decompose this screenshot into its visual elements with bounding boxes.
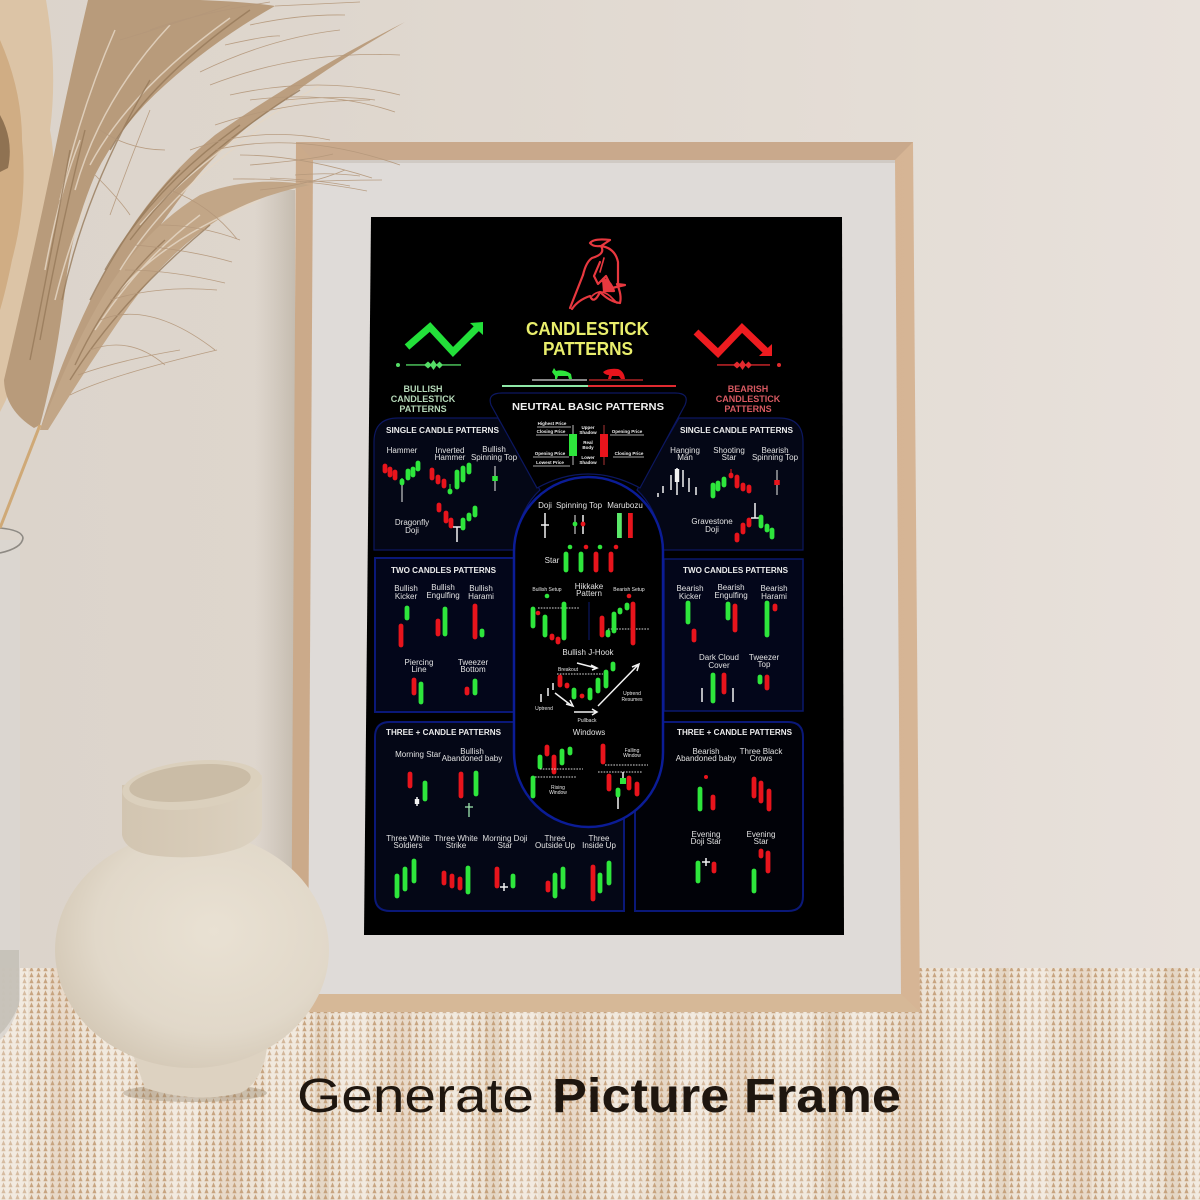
bullish engulfing	[426, 583, 460, 634]
label: bearish	[716, 384, 781, 414]
evening star: Star	[754, 837, 769, 846]
hanging man	[658, 446, 700, 497]
hikkake pattern: Bullish Setup	[532, 587, 562, 593]
gravestone doji: Doji	[705, 525, 719, 534]
label: bearish: BEARISH	[728, 384, 768, 394]
bearish spinning top	[752, 446, 799, 495]
piercing line	[405, 658, 433, 702]
marubozu	[607, 501, 643, 538]
bullish j-hook: Breakout	[558, 667, 579, 673]
bearish spinning top: Spinning Top	[752, 453, 799, 462]
evening star	[747, 830, 775, 891]
tweezer bottom: Tweezer	[458, 658, 488, 667]
label: bullish	[391, 384, 456, 414]
logo: bull and bear figure	[570, 239, 625, 309]
heading: SINGLE CANDLE PATTERNS	[386, 426, 500, 435]
dark cloud cover: Cover	[708, 661, 730, 670]
three black crows: Three Black	[740, 747, 783, 756]
basic candle anatomy diagram: Closing Price	[537, 429, 566, 434]
dragonfly doji: Doji	[405, 526, 419, 535]
morning star: Morning Star	[395, 750, 441, 759]
three black crows	[740, 747, 783, 809]
gravestone doji: Gravestone	[691, 517, 733, 526]
shooting star: Shooting	[713, 446, 745, 455]
windows: Windows	[573, 728, 605, 737]
evening doji star	[691, 830, 722, 881]
bullish j-hook: Pullback	[578, 718, 597, 724]
basic candle anatomy diagram: Lowest Price	[536, 460, 564, 465]
bearish abandoned baby: Abandoned baby	[676, 754, 736, 763]
bullish spinning top: Spinning Top	[471, 453, 518, 462]
panel: neutral basic patterns	[490, 393, 686, 488]
windows: Window	[549, 790, 567, 796]
vase shadow	[123, 1084, 267, 1102]
plume: dark core	[0, 115, 10, 172]
doji: Doji	[538, 501, 552, 510]
ornament: red	[717, 360, 781, 370]
wispy fibres	[70, 2, 400, 395]
bullish engulfing: Engulfing	[426, 591, 460, 600]
basic candle anatomy diagram: Shadow	[579, 430, 597, 435]
bullish spinning top: Bullish	[482, 445, 506, 454]
icon: bear	[603, 369, 625, 379]
spinning top: Spinning Top	[556, 501, 603, 510]
heading: THREE + CANDLE PATTERNS	[386, 728, 502, 737]
panel: three plus candle bullish	[375, 722, 624, 911]
bearish engulfing	[714, 583, 748, 630]
caption	[297, 1070, 901, 1123]
bearish abandoned baby	[676, 747, 736, 809]
windows	[533, 728, 648, 809]
vase lip	[120, 754, 264, 816]
dark cloud cover: Dark Cloud	[699, 653, 739, 662]
title: PATTERNS	[543, 338, 633, 359]
poster	[364, 217, 844, 935]
tweezer top	[749, 653, 779, 688]
basic candle anatomy diagram: Shadow	[579, 460, 597, 465]
frame top rail	[296, 142, 913, 160]
basic candle anatomy diagram: Highest Price	[538, 421, 567, 426]
mat board	[308, 160, 901, 994]
label: bullish: PATTERNS	[399, 404, 447, 414]
plume: lower right sweep	[40, 182, 310, 430]
frame	[291, 142, 920, 1012]
bullish harami: Bullish	[469, 584, 493, 593]
bullish j-hook	[535, 648, 643, 724]
three white strike	[434, 834, 478, 892]
basic candle anatomy diagram: Real	[583, 440, 593, 445]
title	[526, 318, 650, 359]
hanging man: Hanging	[670, 446, 700, 455]
three white strike: Strike	[446, 841, 467, 850]
plume: warm centre	[0, 40, 24, 310]
hikkake pattern: Hikkake	[575, 582, 604, 591]
ornament: green	[396, 360, 461, 370]
fibres across frame	[233, 154, 367, 191]
hanging man: Man	[677, 453, 693, 462]
shooting star: Star	[722, 453, 737, 462]
morning doji star: Star	[498, 841, 513, 850]
panel: three plus candle bearish	[635, 722, 803, 911]
panel: two candles bearish	[664, 559, 803, 711]
three outside up	[535, 834, 576, 896]
dark cloud cover	[699, 653, 739, 702]
morning star	[395, 750, 441, 806]
icon: red down arrow	[696, 328, 772, 356]
bullish abandoned baby: Bullish	[460, 747, 484, 756]
plume: light left	[0, 0, 54, 412]
bullish harami	[468, 584, 494, 637]
divider with bull and bear	[502, 368, 676, 386]
gravestone doji	[691, 503, 772, 540]
caption: Generate	[297, 1070, 534, 1123]
evening doji star: Doji Star	[691, 837, 722, 846]
windows: Falling	[625, 748, 640, 754]
woven rug	[0, 968, 1200, 1200]
bullish j-hook: Resumes	[621, 697, 643, 703]
inverted hammer: Hammer	[435, 453, 466, 462]
mat inner shadow	[313, 160, 895, 163]
bearish kicker	[676, 584, 704, 640]
three inside up	[582, 834, 616, 899]
bullish j-hook: Uptrend	[535, 706, 553, 712]
bullish harami: Harami	[468, 592, 494, 601]
frame bottom rail	[291, 994, 920, 1012]
bearish kicker: Kicker	[679, 592, 701, 601]
dragonfly doji: Dragonfly	[395, 518, 429, 527]
basic candle anatomy diagram: Closing Price	[615, 451, 644, 456]
bullish abandoned baby: Abandoned baby	[442, 754, 502, 763]
hammer	[385, 446, 418, 502]
vase opening	[127, 759, 253, 807]
piercing line: Line	[411, 665, 427, 674]
heading: THREE + CANDLE PATTERNS	[677, 728, 793, 737]
shooting star	[713, 446, 749, 496]
tweezer top: Top	[758, 660, 771, 669]
glass vase	[0, 528, 23, 1040]
doji	[538, 501, 552, 538]
three black crows: Crows	[750, 754, 772, 763]
hikkake pattern	[532, 582, 650, 643]
tweezer bottom	[458, 658, 488, 693]
three white soldiers	[386, 834, 430, 896]
vase neck	[122, 775, 262, 857]
title: CANDLESTICK	[526, 318, 650, 339]
plume light streaks	[45, 18, 320, 330]
hikkake pattern: Pattern	[576, 589, 602, 598]
heading: TWO CANDLES PATTERNS	[683, 566, 789, 575]
bullish engulfing: Bullish	[431, 583, 455, 592]
bearish harami: Harami	[761, 592, 787, 601]
bullish j-hook: Bullish J-Hook	[562, 648, 615, 657]
tweezer top: Tweezer	[749, 653, 779, 662]
bullish spinning top	[471, 445, 518, 491]
three outside up: Outside Up	[535, 841, 576, 850]
windows: Window	[623, 753, 641, 759]
icon: green up arrow	[407, 322, 483, 352]
windows: Rising	[551, 785, 565, 791]
label: bullish: BULLISH	[404, 384, 442, 394]
vase body	[55, 832, 329, 1068]
bullish j-hook: Uptrend	[623, 691, 641, 697]
vase	[55, 754, 329, 1102]
bullish abandoned baby	[442, 747, 502, 817]
three inside up: Three	[589, 834, 610, 843]
bearish harami: Bearish	[760, 584, 788, 593]
three white soldiers: Soldiers	[394, 841, 422, 850]
morning doji star	[483, 834, 528, 891]
hammer: Hammer	[387, 446, 418, 455]
wooden frame	[291, 142, 920, 1012]
star	[545, 545, 618, 570]
basic candle anatomy diagram	[533, 421, 644, 466]
inverted hammer	[432, 446, 469, 494]
heading: NEUTRAL BASIC PATTERNS	[512, 401, 664, 413]
evening star: Evening	[747, 830, 775, 839]
icon: bull	[552, 368, 572, 379]
piercing line: Piercing	[405, 658, 433, 667]
bearish engulfing: Engulfing	[714, 591, 748, 600]
basic candle anatomy diagram: Lower	[581, 455, 595, 460]
heading: TWO CANDLES PATTERNS	[391, 566, 497, 575]
pampas grass	[0, 0, 405, 528]
label: bearish: PATTERNS	[724, 404, 772, 414]
bearish spinning top: Bearish	[761, 446, 789, 455]
bearish harami	[760, 584, 788, 635]
poster background	[364, 217, 844, 935]
marubozu: Marubozu	[607, 501, 643, 510]
three white strike: Three White	[434, 834, 478, 843]
plume: main fan	[4, 0, 275, 428]
bearish kicker: Bearish	[676, 584, 704, 593]
panel: central oval	[514, 477, 663, 827]
plume dark streaks	[30, 10, 300, 380]
basic candle anatomy diagram: Opening Price	[535, 451, 566, 456]
spinning top	[556, 501, 603, 534]
three outside up: Three	[545, 834, 566, 843]
wall shadow beside frame	[255, 190, 295, 990]
dragonfly doji	[395, 505, 475, 542]
panel: single candle bullish	[374, 418, 540, 550]
basic candle anatomy diagram: Upper	[581, 425, 595, 430]
bullish kicker: Kicker	[395, 592, 417, 601]
hikkake pattern: Bearish Setup	[613, 587, 645, 593]
evening doji star: Evening	[692, 830, 720, 839]
label: bearish: CANDLESTICK	[716, 394, 781, 404]
vase foot	[132, 1048, 267, 1097]
three inside up: Inside Up	[582, 841, 616, 850]
basic candle anatomy diagram: Opening Price	[612, 429, 643, 434]
panel: single candle bearish	[637, 418, 803, 550]
caption: Picture Frame	[552, 1070, 901, 1123]
bullish kicker: Bullish	[394, 584, 418, 593]
heading: SINGLE CANDLE PATTERNS	[680, 426, 794, 435]
three white soldiers: Three White	[386, 834, 430, 843]
bearish engulfing: Bearish	[717, 583, 745, 592]
label: bullish: CANDLESTICK	[391, 394, 456, 404]
bearish abandoned baby: Bearish	[692, 747, 720, 756]
inverted hammer: Inverted	[436, 446, 464, 455]
panel: two candles bullish	[375, 558, 514, 712]
stem	[0, 425, 40, 528]
star: Star	[545, 556, 560, 565]
bullish kicker	[394, 584, 418, 645]
plume: upper right sweep	[40, 22, 405, 430]
tweezer bottom: Bottom	[460, 665, 486, 674]
basic candle anatomy diagram: Body	[582, 445, 594, 450]
morning doji star: Morning Doji	[483, 834, 528, 843]
